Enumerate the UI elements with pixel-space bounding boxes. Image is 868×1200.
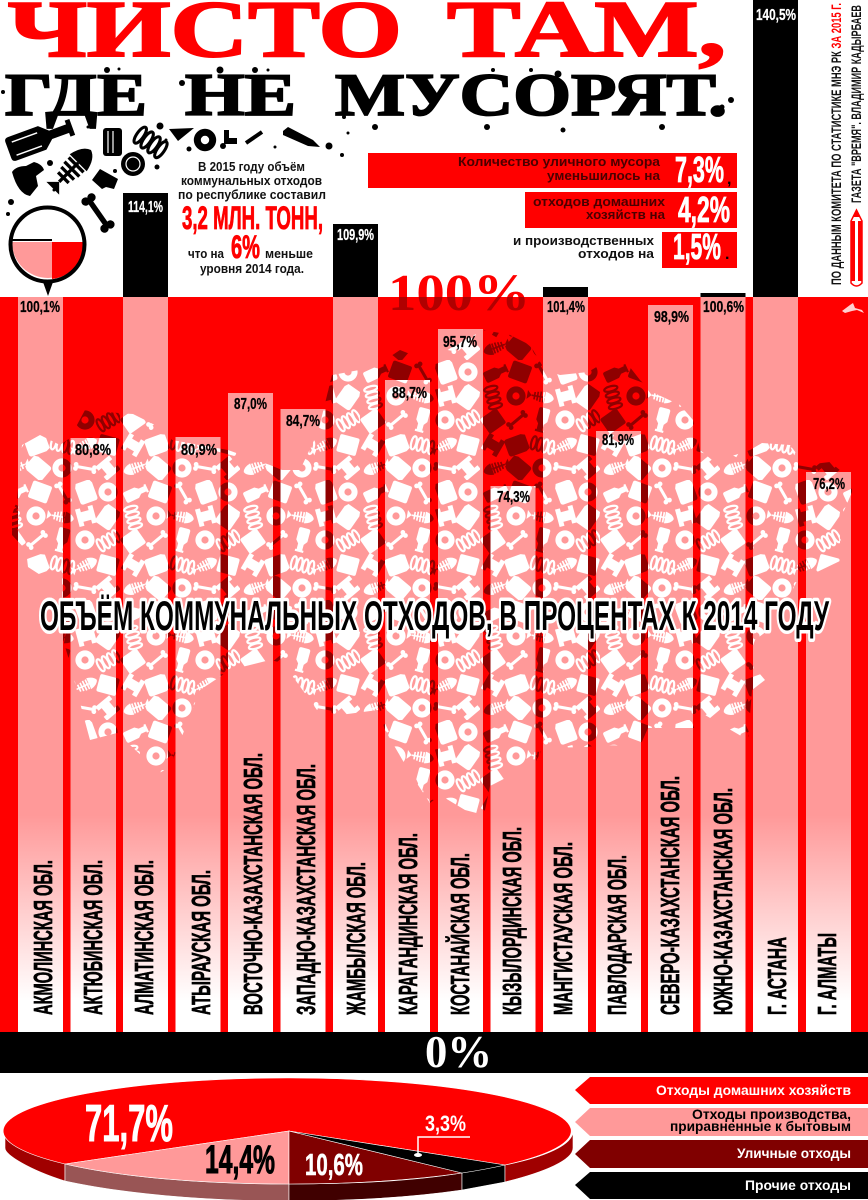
baseline 0 percent	[0, 1026, 868, 1077]
pie chart: waste composition	[3, 1078, 573, 1200]
icon: signature mark	[842, 303, 864, 313]
icon: spring	[132, 125, 169, 159]
region names: КОСТАНАЙСКАЯ ОБЛ.	[445, 853, 475, 1015]
percent values: 100,6%	[703, 299, 744, 316]
legend: street: Уличные отходы	[737, 1145, 851, 1161]
callout: household waste: 4,2%	[678, 189, 730, 230]
percent values: 87,0%	[234, 396, 267, 413]
baseline 0 percent: 0%	[425, 1026, 492, 1077]
slice: household 71.7 percent	[3, 1078, 571, 1165]
callout: industrial waste: 1,5%	[673, 226, 721, 267]
legend: production: приравненные к бытовым	[670, 1118, 851, 1134]
callout: street litter: ,	[727, 171, 731, 188]
region names: Г. АЛМАТЫ	[812, 933, 842, 1015]
percent values: 74,3%	[497, 489, 530, 506]
icon: pipe and screw	[224, 130, 262, 144]
slice: street 10.6 percent	[289, 1131, 462, 1184]
label: 100 percent	[392, 275, 525, 310]
text block: summary: В 2015 году объём	[198, 160, 305, 174]
title: МУСОРЯТ.	[335, 62, 727, 128]
legend: other: Прочие отходы	[745, 1177, 851, 1193]
legend: production	[575, 1106, 868, 1136]
text block: summary: по республике составил	[178, 188, 326, 202]
text block: summary: что на	[188, 247, 225, 261]
percent values: 98,9%	[654, 309, 689, 326]
pink region bars	[0, 297, 868, 1032]
percent values: 84,7%	[286, 413, 320, 430]
region names: МАНГИСТАУСКАЯ ОБЛ.	[548, 842, 578, 1015]
region names: Г. АСТАНА	[762, 937, 792, 1015]
region names	[28, 753, 842, 1016]
icon: cone	[169, 128, 194, 141]
region names: ЖАМБЫЛСКАЯ ОБЛ.	[341, 862, 371, 1016]
pie labels: 3,3%	[425, 1111, 466, 1136]
label: 100 percent: 100%	[388, 265, 530, 322]
title: НЕ	[185, 62, 296, 128]
region names: КАРАГАНДИНСКАЯ ОБЛ.	[393, 833, 423, 1015]
icon: bottle	[4, 115, 77, 162]
percent values: 95,7%	[443, 334, 477, 351]
legend: production: Отходы производства,	[692, 1106, 851, 1122]
callout: household waste	[525, 189, 737, 230]
region names: ВОСТОЧНО-КАЗАХСТАНСКАЯ ОБЛ.	[238, 753, 268, 1015]
black bar segments above 100 percent	[123, 0, 798, 297]
title: ГДЕ	[5, 62, 147, 128]
chart background	[0, 297, 868, 1032]
callout: household waste: хозяйств на	[586, 208, 666, 222]
label: 100 percent: 100%	[388, 265, 530, 322]
text block: summary: уровня 2014 года.	[200, 262, 304, 276]
icon: bone	[80, 192, 116, 234]
map: white layer	[18, 334, 851, 813]
callout: street litter: Количество уличного мусора	[458, 155, 661, 169]
icon: fish skeleton	[44, 142, 99, 197]
legend: household: Отходы домашних хозяйств	[656, 1082, 851, 1098]
title	[1, 0, 734, 132]
callout: household waste: отходов домашних	[533, 195, 665, 209]
pie labels: 10,6%	[305, 1147, 363, 1182]
icon: apple core	[12, 162, 44, 196]
text block: summary: 3,2 МЛН. ТОНН,	[182, 200, 323, 236]
region names: АКТЮБИНСКАЯ ОБЛ.	[78, 860, 108, 1015]
percent values	[20, 7, 845, 506]
region names: ЮЖНО-КАЗАХСТАНСКАЯ ОБЛ.	[708, 788, 738, 1015]
icon: tin can	[103, 128, 122, 156]
text block: summary: меньше	[265, 247, 313, 261]
region names: АКМОЛИНСКАЯ ОБЛ.	[28, 860, 58, 1015]
source credit	[828, 3, 864, 285]
region names: АТЫРАУСКАЯ ОБЛ.	[186, 870, 216, 1015]
text block: summary: коммунальных отходов	[181, 174, 322, 188]
pie side walls	[5, 1131, 573, 1200]
region names: ПАВЛОДАРСКАЯ ОБЛ.	[602, 855, 632, 1015]
map: dark layer	[12, 330, 852, 811]
legend: other	[575, 1172, 868, 1199]
slice: other 3.3 percent	[289, 1131, 505, 1173]
icon: pencil	[283, 127, 320, 147]
percent values: 101,4%	[547, 299, 585, 316]
pie labels	[85, 1095, 470, 1182]
percent values: 81,9%	[602, 432, 634, 449]
callout: industrial waste: отходов на	[578, 247, 655, 261]
percent values: 109,9%	[337, 227, 374, 244]
text block: summary	[178, 160, 326, 276]
percent values: 140,5%	[756, 7, 796, 24]
icon: nut	[194, 129, 216, 151]
callout: street litter: уменьшилось на	[547, 169, 661, 183]
slice: production 14.4 percent	[65, 1131, 289, 1184]
callout: street litter: 7,3%	[675, 149, 724, 190]
percent values: 80,9%	[181, 442, 217, 459]
legend: household	[575, 1077, 868, 1104]
callout: industrial waste: и производственных	[513, 234, 654, 248]
icons: trash pile	[4, 115, 350, 234]
icon: gauge circle	[10, 208, 84, 296]
region names: СЕВЕРО-КАЗАХСТАНСКАЯ ОБЛ.	[655, 776, 685, 1015]
text block: summary: 6%	[231, 229, 260, 265]
icon: red pencil	[851, 210, 862, 286]
callout: industrial waste: .	[725, 246, 729, 263]
percent values: 80,8%	[75, 442, 111, 459]
legend: street	[575, 1140, 868, 1168]
icon: torn paper	[92, 169, 118, 189]
pie labels: 14,4%	[205, 1138, 275, 1182]
percent values: 76,2%	[813, 476, 845, 493]
percent values: 114,1%	[128, 199, 163, 216]
pie labels: 71,7%	[85, 1095, 173, 1153]
callout: industrial waste	[513, 226, 737, 268]
percent values: 100,1%	[20, 299, 60, 316]
region names: ЗАПАДНО-КАЗАХСТАНСКАЯ ОБЛ.	[291, 764, 321, 1015]
region names: АЛМАТИНСКАЯ ОБЛ.	[129, 860, 159, 1015]
callout: street litter	[368, 149, 737, 190]
region names: КЫЗЫЛОРДИНСКАЯ ОБЛ.	[497, 827, 527, 1015]
percent values: 88,7%	[392, 385, 427, 402]
icon: lid	[121, 152, 145, 176]
